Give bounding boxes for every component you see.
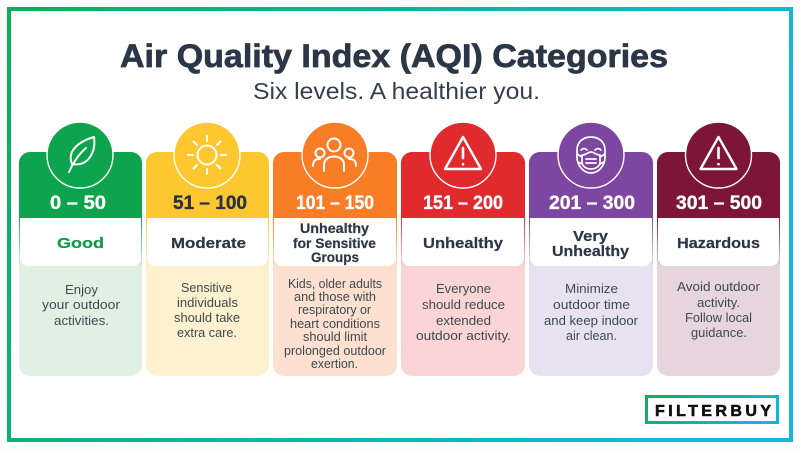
description: heart conditions — [290, 317, 380, 331]
category name: Groups — [311, 249, 359, 265]
description: Minimize — [565, 282, 618, 296]
description: Avoid outdoor — [677, 280, 760, 294]
panel: very unhealthy — [529, 122, 653, 376]
description: should take — [174, 311, 240, 325]
description: guidance. — [691, 326, 747, 340]
description: Everyone — [436, 282, 491, 296]
description: and those with — [294, 290, 376, 304]
description — [42, 283, 120, 328]
title: Air Quality Index (AQI) Categories — [120, 38, 668, 74]
category name: Unhealthy — [300, 220, 369, 236]
range: 301 – 500 — [676, 193, 762, 214]
category name — [293, 220, 376, 265]
description: respiratory or — [298, 303, 371, 317]
description: prolonged outdoor — [284, 344, 386, 358]
category name — [552, 228, 630, 260]
subtitle: Six levels. A healthier you. — [253, 78, 540, 104]
description: outdoor time — [553, 298, 630, 312]
panel: hazardous — [657, 122, 780, 376]
description: should reduce — [422, 298, 505, 312]
description: outdoor activity. — [416, 329, 511, 343]
description: activity. — [697, 296, 740, 310]
logo: filterbuy: FILTERBUY — [655, 403, 771, 420]
description: exertion. — [311, 357, 358, 371]
range: 201 – 300 — [549, 193, 635, 214]
category name: Very — [573, 228, 609, 245]
category name: Unhealthy — [423, 235, 504, 252]
description: and keep indoor — [544, 314, 638, 328]
description: Follow local — [685, 311, 752, 325]
category name: Good — [57, 235, 104, 252]
description: Sensitive — [181, 281, 232, 295]
description — [416, 282, 511, 343]
category name: Moderate — [171, 235, 246, 252]
description: Enjoy — [65, 283, 99, 297]
description: activities. — [54, 314, 109, 328]
description: your outdoor — [42, 298, 120, 312]
range: 151 – 200 — [423, 193, 503, 214]
description: should limit — [303, 330, 368, 344]
icon: warning triangle — [686, 122, 752, 188]
icon: face mask — [558, 122, 624, 188]
range: 51 – 100 — [173, 193, 247, 214]
description — [677, 280, 760, 340]
panel: unhealthy — [401, 122, 525, 376]
description: extended — [436, 314, 491, 328]
range: 101 – 150 — [296, 193, 374, 214]
description: air clean. — [566, 329, 617, 343]
description: individuals — [177, 296, 238, 310]
description: extra care. — [177, 326, 237, 340]
icon: people — [302, 122, 368, 188]
icon: warning triangle — [430, 122, 496, 188]
icon: leaf — [47, 122, 113, 188]
category name: Hazardous — [677, 235, 760, 252]
description — [284, 277, 386, 371]
description — [174, 281, 240, 340]
description: Kids, older adults — [288, 277, 382, 291]
logo: filterbuy — [646, 396, 778, 422]
panel: good — [19, 122, 142, 376]
icon: sun — [174, 122, 240, 188]
panel: unhealthy for sensitive groups — [273, 122, 397, 376]
category name: Unhealthy — [552, 243, 630, 260]
panel: moderate — [146, 122, 269, 376]
range: 0 – 50 — [50, 193, 106, 214]
description — [544, 282, 638, 343]
category name: for Sensitive — [293, 235, 376, 251]
